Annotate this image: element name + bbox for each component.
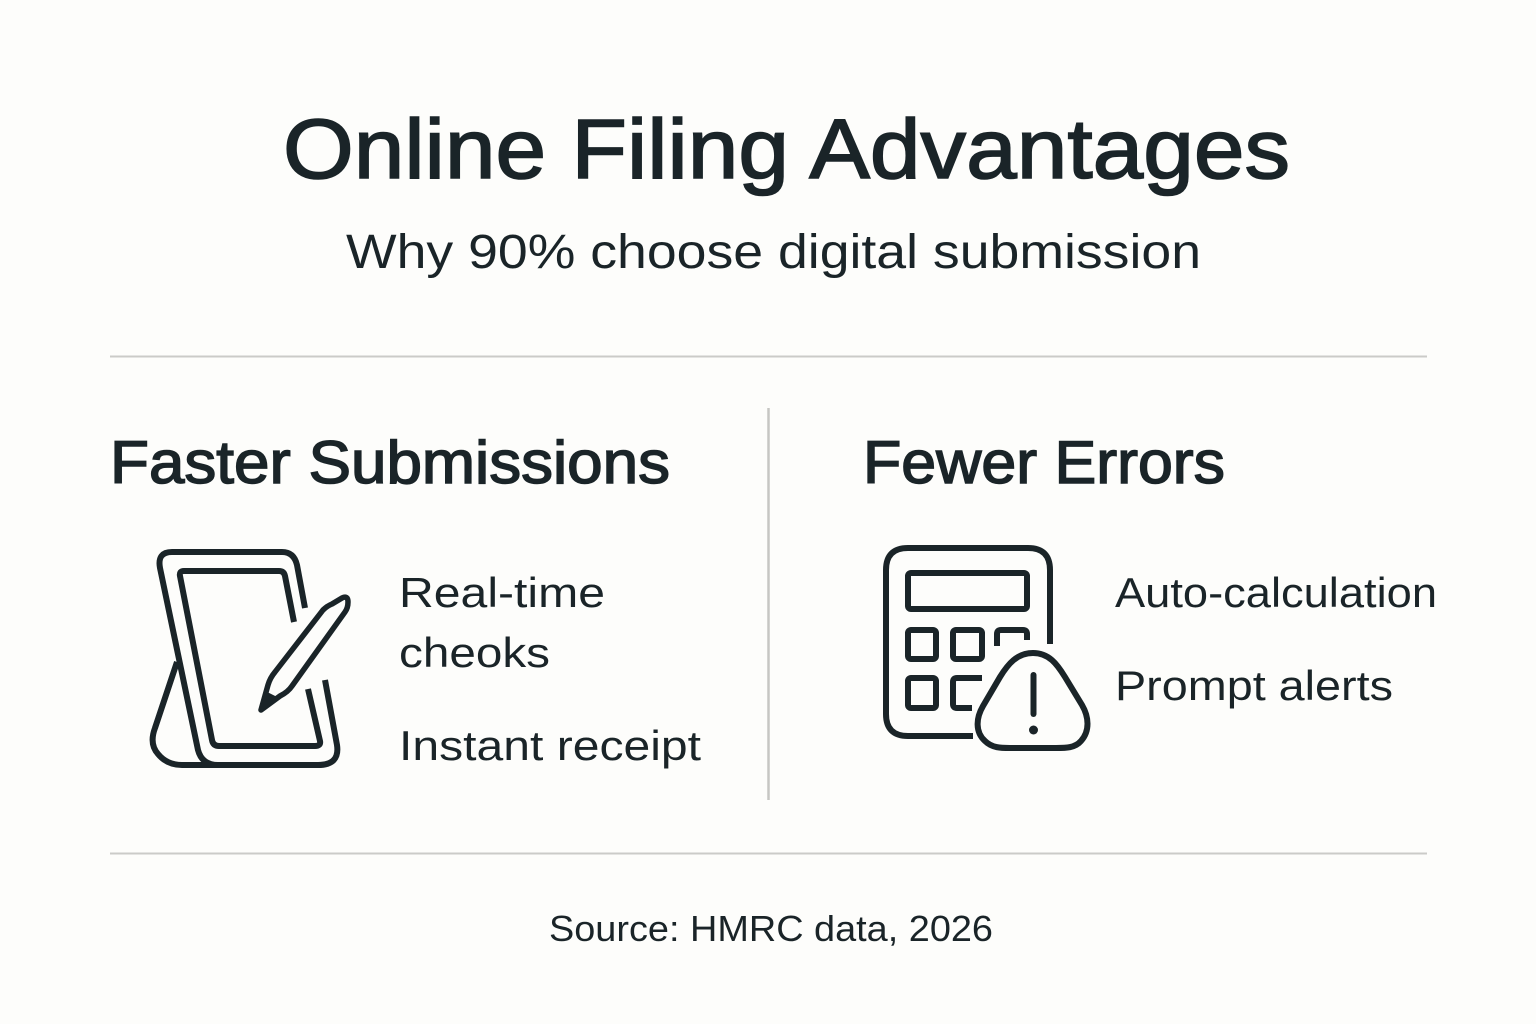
icon: calculator with warning	[886, 548, 1088, 748]
list: fewer errors items: Prompt alerts	[1115, 662, 1393, 709]
list: faster submissions items: Instant receipt	[399, 722, 701, 769]
source note: Source: HMRC data, 2026	[549, 908, 993, 949]
list: faster submissions items	[399, 569, 701, 769]
subtitle: Why 90% choose digital submission	[346, 226, 1201, 279]
list: faster submissions items: Real-time	[399, 569, 605, 616]
heading: fewer errors: Fewer Errors	[863, 429, 1225, 496]
panel: fewer errors	[863, 429, 1437, 748]
list: fewer errors items	[1115, 569, 1437, 709]
list: fewer errors items: Auto-calculation	[1115, 569, 1437, 616]
title: Online Filing Advantages	[283, 102, 1290, 196]
panel: faster submissions	[110, 429, 701, 769]
list: faster submissions items: cheoks	[399, 629, 550, 676]
icon: tablet with pen	[153, 552, 348, 765]
heading: faster submissions: Faster Submissions	[110, 429, 670, 496]
